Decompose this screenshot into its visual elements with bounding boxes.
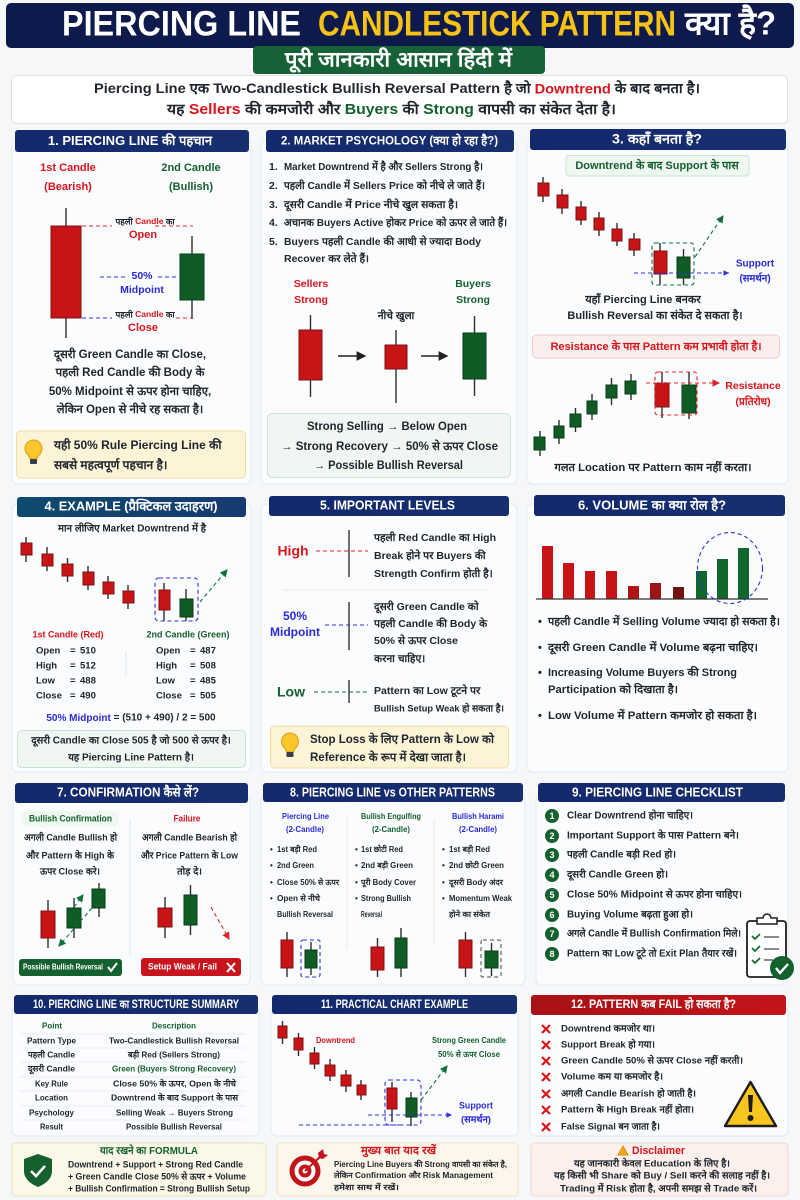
numbered list: पहली Candle में Sellers Price को नीचे ले जाते हैं।	[283, 179, 485, 192]
level: low: Pattern का Low टूटने पर	[374, 684, 481, 698]
subtitle badge: पूरी जानकारी आसान हिंदी में	[284, 47, 514, 74]
table: summary: Description	[152, 1020, 196, 1030]
heading: panel 7	[15, 783, 248, 803]
failure list: अगली Candle Bearish हो जाती है।	[561, 1088, 696, 1100]
checklist items: दूसरी Candle Green हो।	[566, 868, 668, 882]
table: OHLC values: 490	[80, 691, 96, 702]
column: failure: और Price Pattern के Low	[141, 850, 239, 862]
checklist items: 3	[549, 850, 555, 860]
numbered list: 3.	[269, 199, 278, 211]
column: bullish confirmation	[19, 811, 122, 976]
table: OHLC values: Close	[156, 691, 182, 702]
failure list: Support Break हो गया।	[561, 1039, 655, 1051]
heading: panel 3: 3. कहाँ बनता है?	[612, 131, 702, 147]
checklist items	[545, 809, 742, 961]
column: bullish harami: 2nd छोटी Green	[449, 860, 504, 870]
failure list: False Signal बन जाता है।	[561, 1121, 660, 1133]
column: piercing line: •	[270, 861, 273, 870]
table: OHLC values: High	[156, 661, 177, 672]
summary flow box: Strong Selling → Below Open	[307, 421, 467, 433]
heading: panel 3	[530, 129, 786, 150]
box: disclaimer: यह जानकारी केवल Education के लिए है।	[573, 1158, 730, 1170]
tag: downtrend near support: Downtrend के बाद Support के पास	[575, 158, 739, 172]
box: key takeaway: हमेशा साथ में रखें।	[333, 1182, 399, 1192]
column: bullish harami	[442, 812, 513, 977]
heading: panel 11	[272, 995, 517, 1014]
level: low: Bullish Setup Weak हो सकता है।	[374, 703, 504, 715]
checklist items: अगले Candle में Bullish Confirmation मिले।	[567, 927, 741, 940]
diagram: two candles with levels: 50%	[131, 270, 153, 282]
column: bullish engulfing	[355, 812, 421, 977]
table: OHLC values: 1st Candle (Red)	[32, 629, 104, 639]
rule explanation text: दूसरी Green Candle का Close,	[53, 347, 206, 362]
box: key takeaway: Piercing Line Buyers की Strong वापसी का संकेत है,	[334, 1159, 507, 1169]
heading: panel 4	[17, 497, 246, 517]
failure list: Green Candle 50% से ऊपर Close नहीं करती।	[561, 1055, 743, 1067]
table: OHLC values: Open	[36, 646, 60, 657]
table: OHLC values: 485	[200, 676, 217, 687]
level: high	[277, 530, 496, 580]
heading: panel 2: 2. MARKET PSYCHOLOGY (क्या हो रहा है?)	[281, 134, 498, 148]
table: summary: Psychology	[29, 1107, 74, 1117]
caption: reversal signal: Bullish Reversal का संकेत दे सकता है।	[567, 308, 743, 322]
chart: practical example: Downtrend	[316, 1036, 355, 1045]
column: bullish engulfing: •	[355, 878, 358, 887]
tag: downtrend near support	[566, 156, 749, 176]
numbered list: 2.	[269, 180, 278, 192]
heading: panel 10: 10. PIERCING LINE का STRUCTURE SUMMARY	[33, 999, 239, 1011]
chart: practical example: (समर्थन)	[461, 1114, 491, 1126]
chart: downtrend at support: Support	[736, 259, 775, 270]
chart: volume bars	[536, 532, 768, 604]
example intro: मान लीजिए Market Downtrend में है	[57, 522, 207, 535]
chart: uptrend at resistance: (प्रतिरोध)	[735, 395, 771, 408]
diagram: two candles with levels: Close	[128, 322, 158, 334]
column: bullish engulfing: •	[355, 861, 358, 870]
callout: 50% rule: सबसे महत्वपूर्ण पहचान है।	[53, 458, 167, 473]
table: OHLC values: 510	[80, 646, 96, 657]
diagram: two candles with levels: पहली Candle का	[114, 216, 175, 226]
heading: panel 1: 1. PIERCING LINE की पहचान	[48, 133, 213, 148]
intro text box: यह Sellers की कमजोरी और Buyers की Strong वापसी का संकेत देता है।	[166, 100, 616, 118]
icon: light bulb	[281, 733, 299, 757]
checklist items: 1	[549, 811, 555, 821]
heading: panel 8: 8. PIERCING LINE vs OTHER PATTERNS	[290, 785, 495, 799]
table: summary: Pattern Type	[27, 1035, 76, 1045]
heading: panel 9: 9. PIERCING LINE CHECKLIST	[572, 784, 743, 799]
numbered list: Recover कर लेते हैं।	[284, 252, 369, 265]
panel: 9 checklist	[536, 783, 794, 985]
diagram: two candles with levels: Midpoint	[120, 284, 164, 296]
icon: shield	[24, 1154, 52, 1187]
table: summary: Downtrend के बाद Support के पास	[111, 1092, 239, 1102]
rule explanation text: 50% Midpoint से ऊपर होना चाहिए,	[49, 384, 211, 398]
column: piercing line	[270, 812, 340, 977]
numbered list: अचानक Buyers Active होकर Price को ऊपर ले जाते हैं।	[284, 216, 507, 229]
level: midpoint: करना चाहिए।	[373, 652, 425, 665]
rule explanation text	[49, 347, 211, 416]
failure list: Volume कम या कमजोर है।	[561, 1071, 663, 1083]
caption: reversal signal: यहाँ Piercing Line बनकर	[584, 292, 701, 306]
column: bullish engulfing: Bullish Engulfing	[361, 812, 421, 821]
icon: warning triangle	[725, 1082, 776, 1126]
level: high: पहली Red Candle का High	[373, 531, 496, 544]
column: piercing line: Open से नीचे	[277, 893, 321, 903]
table: OHLC values: 487	[200, 646, 216, 657]
box: remember formula	[12, 1143, 266, 1196]
caption: wrong location: गलत Location पर Pattern काम नहीं करता।	[553, 460, 752, 474]
column: bullish harami: (2-Candle)	[459, 825, 497, 834]
bullet list: volume: दूसरी Green Candle में Volume बढ़ना चाहिए।	[547, 640, 758, 655]
chart: downtrend at support	[538, 177, 775, 285]
table: OHLC values: =	[70, 691, 76, 702]
bullet list: volume: Increasing Volume Buyers की Strong	[548, 665, 737, 679]
candle labels	[40, 162, 221, 193]
panel: 8 comparison	[261, 783, 525, 985]
table: OHLC values: =	[190, 691, 196, 702]
column: bullish confirmation: ऊपर Close करे।	[39, 866, 100, 878]
table: summary: Point	[42, 1020, 62, 1030]
intro text box	[12, 76, 788, 124]
table: summary: Result	[40, 1121, 63, 1131]
table: OHLC values: =	[190, 676, 196, 687]
table: summary: Two-Candlestick Bullish Reversal	[109, 1035, 239, 1045]
column: bullish engulfing: Strong Bullish	[361, 894, 411, 903]
panel: 1 piercing line identification	[12, 130, 251, 484]
column: failure: Failure	[174, 813, 200, 823]
column: bullish harami: •	[442, 861, 445, 870]
numbered list: Market Downtrend में है और Sellers Strong है।	[284, 160, 483, 173]
level: high: Break होने पर Buyers की	[374, 549, 487, 562]
table: summary: Possible Bullish Reversal	[126, 1121, 222, 1131]
heading: panel 4: 4. EXAMPLE (प्रैक्टिकल उदाहरण)	[44, 498, 218, 513]
checklist items: Buying Volume बढ़ता हुआ हो।	[567, 908, 693, 922]
panel: 5 important levels	[261, 496, 517, 772]
column: piercing line: (2-Candle)	[286, 825, 324, 834]
column: bullish harami: •	[442, 845, 445, 854]
chart: uptrend at resistance: Resistance	[725, 380, 781, 392]
diagram: two candles with levels: पहली Candle का	[114, 309, 175, 319]
heading: panel 8	[263, 783, 523, 802]
diagram: candle sequence: Strong	[456, 294, 490, 306]
diagram: two candles with levels	[51, 208, 204, 338]
table: OHLC values: =	[70, 646, 76, 657]
table: OHLC values: 512	[80, 661, 96, 672]
icon: clipboard with check	[747, 914, 794, 980]
table: OHLC values: Low	[156, 676, 176, 687]
bullet list: volume: Low Volume में Pattern कमजोर हो सकता है।	[548, 708, 757, 722]
chart: practical example: Strong Green Candle	[432, 1036, 507, 1045]
chart: uptrend at resistance	[534, 372, 781, 456]
heading: panel 12: 12. PATTERN कब FAIL हो सकता है?	[571, 997, 736, 1011]
table: OHLC values: =	[70, 676, 76, 687]
box: key takeaway: लेकिन Confirmation और Risk Management	[333, 1170, 493, 1180]
chart: downtrend at support: (समर्थन)	[739, 272, 771, 285]
panel: 12 when pattern fails	[530, 995, 788, 1136]
candle labels: (Bearish)	[44, 181, 92, 193]
level: low: Low	[277, 684, 305, 700]
callout: stop loss: Reference के रूप में देखा जाता है।	[310, 750, 466, 764]
heading: panel 11: 11. PRACTICAL CHART EXAMPLE	[321, 999, 468, 1011]
callout: stop loss	[270, 726, 508, 768]
badge: possible bullish reversal	[19, 959, 122, 976]
title banner: क्या है?	[684, 4, 776, 42]
chart: practical example	[278, 1021, 507, 1126]
panel: 7 confirmation	[13, 783, 250, 985]
box: remember formula: Downtrend + Support + Strong Red Candle	[68, 1159, 243, 1169]
heading: panel 6	[534, 495, 785, 516]
column: piercing line: Close 50% से ऊपर	[277, 877, 340, 887]
title banner: CANDLESTICK PATTERN	[318, 4, 676, 43]
level: midpoint: 50% से ऊपर Close	[374, 634, 458, 647]
bullet list: volume: पहली Candle में Selling Volume ज्यादा हो सकता है।	[547, 614, 780, 628]
checklist items: पहली Candle बड़ी Red हो।	[566, 848, 676, 861]
level: midpoint: Midpoint	[270, 625, 320, 639]
bullet list: volume: •	[538, 642, 542, 654]
conclusion box: दूसरी Candle का Close 505 है जो 500 से ऊपर है।	[30, 734, 231, 748]
table: OHLC values: =	[190, 661, 196, 672]
panel: 6 volume role	[527, 495, 788, 772]
checklist items: 5	[549, 890, 555, 900]
checklist items: Clear Downtrend होना चाहिए।	[567, 809, 693, 822]
panel: 10 structure summary	[12, 995, 259, 1136]
column: piercing line: •	[270, 845, 273, 854]
table: summary	[20, 1020, 245, 1131]
diagram: candle sequence: Buyers	[455, 278, 491, 290]
level: high: High	[277, 543, 309, 559]
level: midpoint: पहली Candle की Body के	[373, 617, 488, 630]
bullet list: volume: •	[538, 710, 542, 722]
table: summary: Green (Buyers Strong Recovery)	[112, 1063, 236, 1073]
numbered list: 1.	[269, 161, 278, 173]
table: summary: दूसरी Candle	[27, 1063, 75, 1074]
column: piercing line: 2nd Green	[277, 861, 314, 870]
caption: reversal signal	[567, 292, 743, 322]
checklist items: Important Support के पास Pattern बने।	[567, 829, 739, 842]
summary flow box: → Possible Bullish Reversal	[314, 460, 463, 472]
column: bullish engulfing: (2-Candle)	[372, 825, 410, 834]
table: summary: Selling Weak → Buyers Strong	[116, 1107, 233, 1117]
icon: small warning	[618, 1146, 628, 1155]
heading: panel 5	[269, 496, 509, 516]
column: bullish harami: 1st बड़ी Red	[449, 844, 490, 854]
table: OHLC values: 508	[200, 661, 216, 672]
candle labels: 1st Candle	[40, 162, 96, 174]
table: OHLC values: Open	[156, 646, 180, 657]
column: bullish engulfing: 1st छोटी Red	[361, 844, 403, 854]
badge: setup weak: Setup Weak / Fail	[148, 962, 217, 973]
checklist items: 8	[549, 949, 555, 959]
table: summary: Location	[35, 1092, 68, 1102]
column: bullish engulfing: Reversal	[361, 910, 382, 919]
heading: panel 6: 6. VOLUME का क्या रोल है?	[578, 497, 726, 512]
column: bullish confirmation: और Pattern के High के	[26, 850, 115, 862]
level: high: Strength Confirm होती है।	[374, 567, 493, 580]
column: bullish harami: Bullish Harami	[452, 812, 504, 821]
table: OHLC values: High	[36, 661, 57, 672]
column: bullish harami: •	[442, 894, 445, 903]
bullet list: volume: •	[538, 616, 542, 628]
failure list: Downtrend कमजोर था।	[561, 1023, 655, 1035]
table: OHLC values: 2nd Candle (Green)	[146, 629, 230, 639]
box: remember formula: + Bullish Confirmation = Strong Bullish Setup	[68, 1183, 250, 1193]
callout: 50% rule	[16, 431, 246, 478]
rule explanation text: पहली Red Candle की Body के	[55, 365, 206, 379]
column: bullish engulfing: •	[355, 845, 358, 854]
box: key takeaway: मुख्य बात याद रखें	[360, 1143, 437, 1158]
bullet list: volume: •	[538, 667, 542, 679]
warning tag: near resistance: Resistance के पास Pattern कम प्रभावी होता है।	[550, 339, 762, 353]
column: bullish harami: होने का संकेत	[448, 909, 490, 919]
subtitle badge	[253, 46, 545, 74]
level: midpoint: दूसरी Green Candle को	[373, 600, 480, 614]
title banner: PIERCING LINE	[62, 4, 301, 43]
panel: 3 where it forms	[527, 129, 788, 484]
title banner	[6, 3, 794, 48]
level: low	[277, 680, 504, 715]
numbered list: दूसरी Candle में Price नीचे खुल सकता है।	[283, 198, 458, 212]
table: summary: पहली Candle	[27, 1049, 75, 1059]
checklist items: 2	[549, 831, 555, 841]
checklist items: 7	[549, 929, 555, 939]
failure list: Pattern के High Break नहीं होता।	[561, 1104, 694, 1116]
badge: setup weak	[141, 958, 241, 976]
column: failure: अगली Candle Bearish हो	[142, 832, 237, 844]
diagram: two candles with levels: Open	[129, 229, 157, 241]
table: summary: Key Rule	[35, 1078, 68, 1088]
diagram: candle sequence: Strong	[294, 294, 328, 306]
candle labels: 2nd Candle	[161, 162, 221, 174]
conclusion box: यह Piercing Line Pattern है।	[67, 751, 194, 764]
conclusion box	[18, 730, 246, 768]
icon: target	[290, 1149, 328, 1186]
box: key takeaway	[277, 1143, 518, 1196]
checklist items: Close 50% Midpoint से ऊपर होना चाहिए।	[567, 888, 742, 901]
summary flow box: → Strong Recovery → 50% से ऊपर Close	[281, 439, 498, 453]
warning tag: near resistance	[532, 335, 780, 358]
level: midpoint	[270, 600, 488, 665]
heading: panel 2	[266, 130, 514, 152]
checklist items: Pattern का Low टूटे तो Exit Plan तैयार रखें।	[567, 947, 737, 961]
column: bullish confirmation: अगली Candle Bullish हो	[24, 832, 117, 844]
heading: panel 5: 5. IMPORTANT LEVELS	[320, 497, 455, 512]
checklist items: 4	[549, 870, 555, 880]
icon: light bulb	[25, 440, 42, 464]
table: OHLC values: Low	[36, 676, 56, 687]
table: OHLC values: =	[190, 646, 196, 657]
badge: possible bullish reversal: Possible Bullish Reversal	[23, 963, 103, 972]
bullet list: volume	[538, 614, 780, 722]
box: remember formula: याद रखने का FORMULA	[99, 1144, 198, 1157]
summary flow box	[268, 414, 510, 478]
failure list	[542, 1023, 743, 1133]
box: disclaimer: यह किसी भी Share को Buy / Sell करने की सलाह नहीं है।	[553, 1170, 770, 1182]
box: disclaimer	[531, 1143, 788, 1196]
heading: panel 7: 7. CONFIRMATION कैसे लें?	[57, 784, 199, 799]
column: bullish harami: Momentum Weak	[449, 894, 513, 903]
column: bullish confirmation: Bullish Confirmation	[29, 813, 112, 823]
column: failure: तोड़ दे।	[176, 866, 202, 878]
diagram: candle sequence: नीचे खुला	[377, 309, 416, 323]
bullet list: volume: Participation को दिखाता है।	[548, 682, 678, 696]
box: remember formula: + Green Candle Close 50% से ऊपर + Volume	[68, 1170, 246, 1181]
table: OHLC values: 505	[200, 691, 217, 702]
chart: example downtrend	[21, 537, 227, 621]
column: bullish engulfing: 2nd बड़ी Green	[361, 860, 413, 870]
panel: 4 example	[12, 497, 251, 772]
table: OHLC values: Close	[36, 691, 62, 702]
level: midpoint: 50%	[283, 609, 307, 623]
table: OHLC values	[32, 629, 230, 702]
column: piercing line: •	[270, 894, 273, 903]
table: OHLC values: 488	[80, 676, 96, 687]
column: bullish engulfing: •	[355, 894, 358, 903]
column: piercing line: Bullish Reversal	[277, 910, 333, 919]
candle labels: (Bullish)	[169, 181, 213, 193]
box: disclaimer: Trading में Risk होता है, अपनी समझ से Trade करें।	[560, 1183, 757, 1195]
column: piercing line: Piercing Line	[282, 812, 330, 821]
column: bullish engulfing: पूरी Body Cover	[360, 877, 416, 888]
heading: panel 9	[538, 783, 785, 802]
numbered list	[269, 160, 507, 265]
table: OHLC values: =	[70, 661, 76, 672]
chart: practical example: 50% से ऊपर Close	[438, 1049, 501, 1059]
column: bullish harami: दूसरी Body अंदर	[448, 877, 504, 888]
panel: 2 market psychology	[261, 130, 517, 484]
diagram: candle sequence: Sellers	[294, 278, 328, 290]
numbered list: 5.	[269, 236, 278, 248]
diagram: candle sequence	[294, 278, 491, 403]
heading: panel 10	[14, 995, 258, 1014]
chart: practical example: Support	[459, 1101, 494, 1112]
intro text box: Piercing Line एक Two-Candlestick Bullish Reversal Pattern है जो Downtrend के बाद बनता है।	[94, 80, 700, 96]
table: summary: Close 50% के ऊपर, Open के नीचे	[113, 1078, 237, 1088]
callout: 50% rule: यही 50% Rule Piercing Line की	[53, 438, 222, 452]
column: failure	[141, 813, 241, 976]
rule explanation text: लेकिन Open से नीचे रह सकता है।	[56, 402, 203, 416]
column: piercing line: •	[270, 878, 273, 887]
column: bullish harami: •	[442, 878, 445, 887]
column: piercing line: 1st बड़ी Red	[277, 844, 317, 854]
heading: panel 1	[15, 130, 249, 152]
numbered list: 4.	[269, 217, 278, 229]
callout: stop loss: Stop Loss के लिए Pattern के Low को	[310, 732, 495, 746]
midpoint formula: 50% Midpoint = (510 + 490) / 2 = 500	[46, 713, 216, 724]
table: summary: बड़ी Red (Sellers Strong)	[127, 1049, 220, 1059]
panel: 11 practical chart example	[271, 995, 518, 1136]
numbered list: Buyers पहली Candle की आधी से ज्यादा Body	[284, 235, 481, 248]
box: disclaimer: Disclaimer	[632, 1145, 686, 1157]
heading: panel 12	[531, 995, 786, 1015]
checklist items: 6	[549, 910, 555, 920]
